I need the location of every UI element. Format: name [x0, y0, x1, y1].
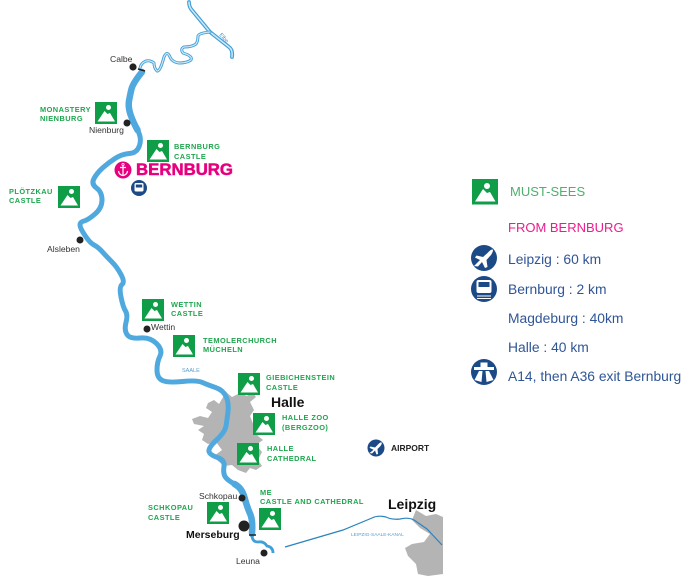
legend: Leipzig distance	[471, 245, 601, 271]
title: Bernburg with anchor: BERNBURG	[136, 161, 233, 179]
map: Leipzig city area	[405, 510, 443, 576]
must-see: Schkopau Castle: SCHKOPAU	[148, 503, 193, 512]
must-see: Plötzkau Castle	[9, 186, 80, 208]
map: Halle city area	[192, 392, 263, 473]
must-see: Halle Zoo	[253, 413, 329, 435]
legend: Magdeburg distance: Magdeburg : 40km	[508, 310, 623, 326]
must-see: Halle Cathedral	[237, 443, 317, 465]
legend: from Bernburg: FROM BERNBURG	[508, 220, 624, 235]
must-see: Schkopau Castle	[148, 502, 229, 524]
towns: Merseburg	[186, 529, 240, 541]
must-see: Giebichenstein Castle: GIEBICHENSTEIN	[266, 373, 335, 382]
legend: must-sees	[472, 179, 585, 204]
towns: Leuna	[236, 556, 260, 566]
must-see: Bernburg Castle: CASTLE	[174, 152, 206, 161]
locks	[138, 69, 256, 535]
map: Saale lower reach	[252, 535, 273, 553]
must-see: Halle Zoo: HALLE ZOO	[282, 413, 329, 422]
map: Leipzig-Saale canal	[285, 516, 442, 547]
towns: Calbe	[110, 54, 133, 64]
must-see: Bernburg Castle: BERNBURG	[174, 142, 220, 151]
icon: train at Bernburg	[131, 180, 147, 196]
label: Elbe: Elbe	[218, 32, 229, 45]
must-see: Plötzkau Castle: PLÖTZKAU	[9, 187, 53, 196]
must-see: Merseburg Castle and Cathedral: ME	[260, 488, 272, 497]
must-see: Bernburg Castle	[147, 140, 220, 162]
must-see: Monastery Nienburg: MONASTERY	[40, 105, 91, 114]
title: Leipzig: Leipzig	[388, 496, 436, 512]
label: Saale: SAALE	[182, 368, 200, 374]
must-see: Wettin Castle	[142, 299, 203, 321]
label: airport: AIRPORT	[391, 443, 430, 453]
legend: Bernburg distance	[471, 276, 606, 302]
must-see: Monastery Nienburg: NIENBURG	[40, 114, 83, 123]
must-see: Temolerchurch Mücheln	[173, 335, 277, 357]
towns: Nienburg	[89, 125, 124, 135]
legend: Leipzig distance: Leipzig : 60 km	[508, 251, 601, 267]
must-see: Merseburg Castle and Cathedral: CASTLE AND CATHEDRAL	[260, 497, 364, 506]
must-see: Halle Cathedral: HALLE	[267, 444, 294, 453]
must-see: Wettin Castle: CASTLE	[171, 309, 203, 318]
map: Saale river	[80, 72, 252, 535]
map: Elbe river	[140, 2, 232, 71]
must-see: Giebichenstein Castle: CASTLE	[266, 383, 298, 392]
must-see: Schkopau Castle: CASTLE	[148, 513, 180, 522]
legend: Bernburg distance: Bernburg : 2 km	[508, 281, 606, 297]
must-see: Halle Zoo: (BERGZOO)	[282, 423, 328, 432]
must-see: Plötzkau Castle: CASTLE	[9, 196, 41, 205]
towns	[47, 54, 268, 566]
legend	[471, 179, 681, 385]
must-see: Temolerchurch Mücheln: MÜCHELN	[203, 345, 243, 354]
must-see: Monastery Nienburg	[40, 102, 117, 124]
towns: Wettin	[151, 322, 175, 332]
must-see: Giebichenstein Castle	[238, 373, 335, 395]
must-see: Wettin Castle: WETTIN	[171, 300, 202, 309]
towns: Alsleben	[47, 244, 80, 254]
legend: must-sees: MUST-SEES	[510, 184, 585, 199]
towns: Schkopau	[199, 491, 237, 501]
label: canal: LEIPZIG-SAALE-KANAL	[351, 532, 404, 538]
legend: motorway: A14, then A36 exit Bernburg	[508, 368, 681, 384]
must-see: Temolerchurch Mücheln: TEMOLERCHURCH	[203, 336, 277, 345]
legend: motorway	[471, 359, 681, 385]
legend: Halle distance: Halle : 40 km	[508, 339, 589, 355]
icon: airport	[368, 440, 384, 456]
must-see: Merseburg Castle and Cathedral	[259, 488, 364, 530]
title: Halle: Halle	[271, 394, 305, 410]
must-see: Halle Cathedral: CATHEDRAL	[267, 454, 317, 463]
